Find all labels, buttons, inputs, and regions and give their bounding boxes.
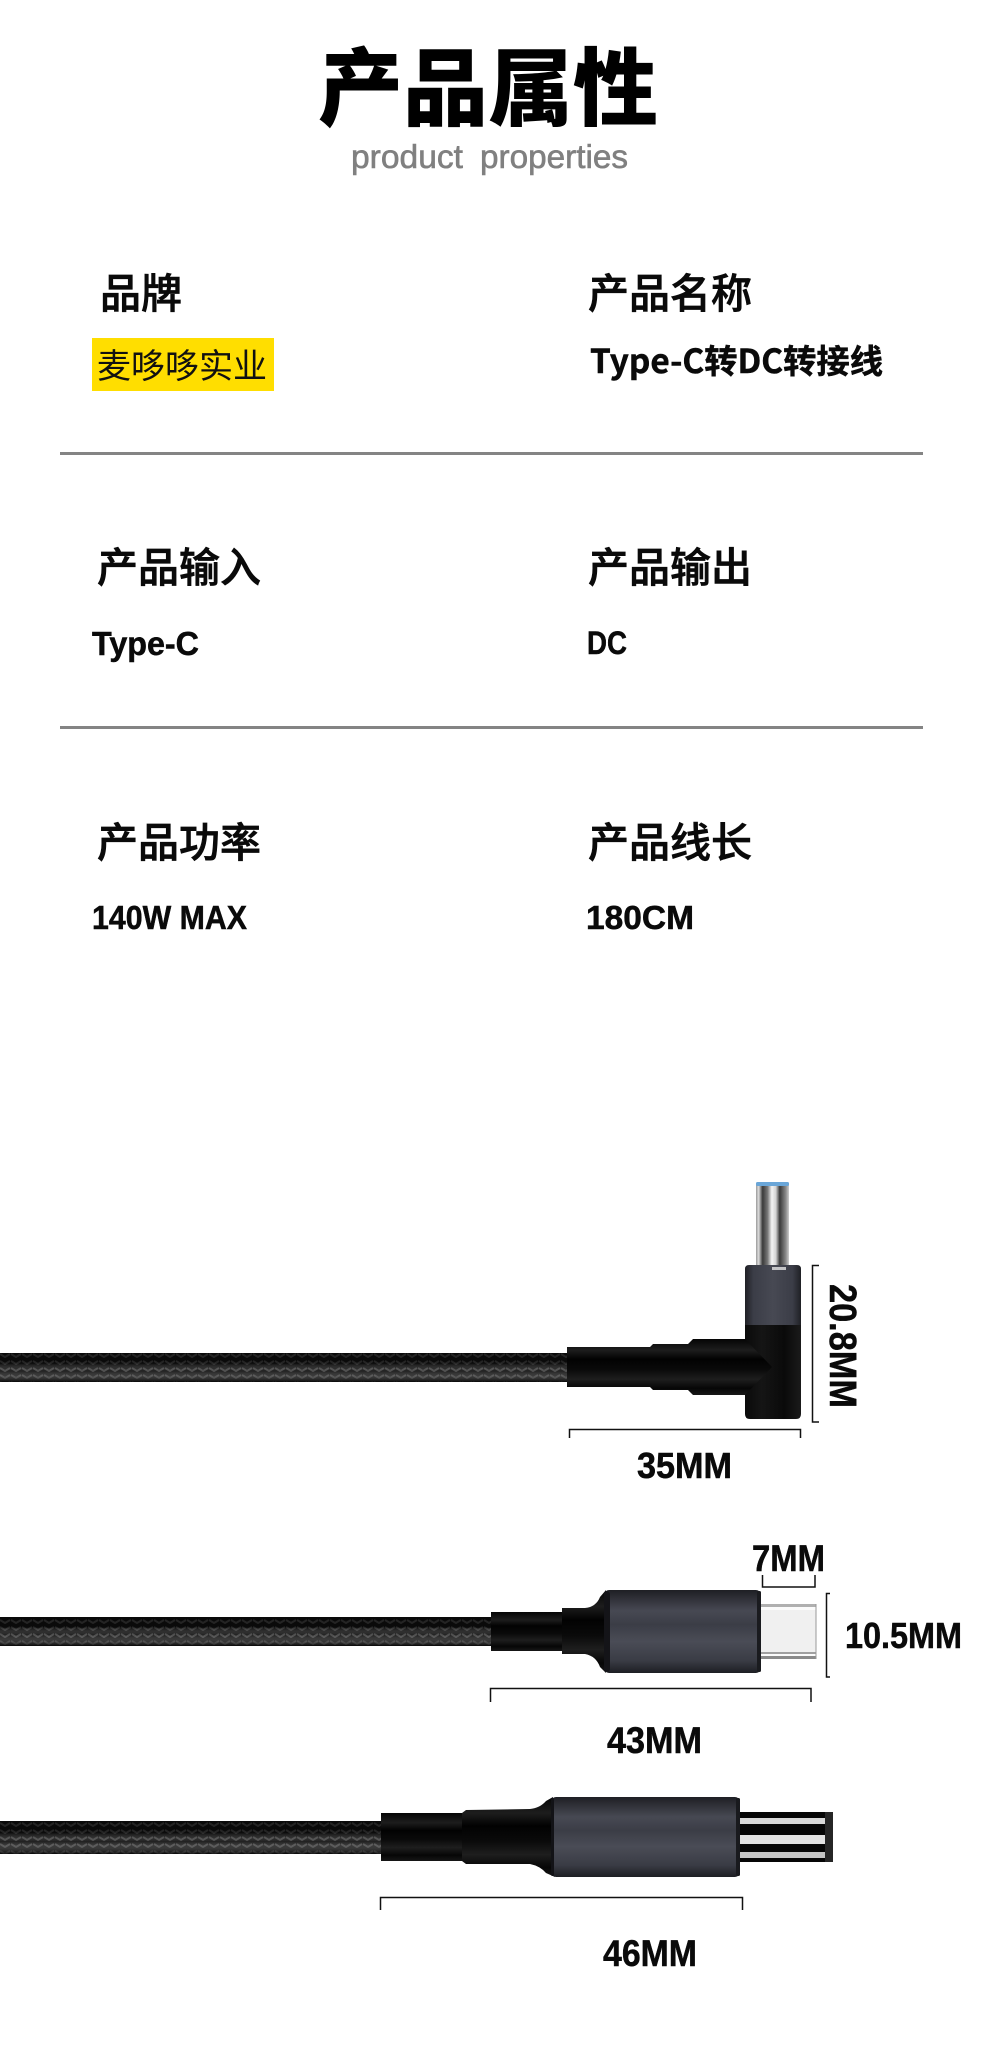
attribute: output: 产品输出 bbox=[588, 534, 752, 594]
attribute: product name: 产品名称 bbox=[588, 260, 752, 320]
attribute: product name bbox=[588, 260, 883, 383]
attribute: cable length: 产品线长 bbox=[588, 809, 752, 869]
attribute: input: Type-C bbox=[92, 625, 199, 662]
attribute: brand bbox=[92, 260, 274, 391]
dimension: 35MM bbox=[570, 1430, 800, 1486]
icon: metal pin with blue tip bbox=[756, 1182, 789, 1266]
dimension: 35MM: 35MM bbox=[637, 1445, 732, 1486]
dimension: 43MM: 43MM bbox=[607, 1720, 702, 1761]
connector body bbox=[567, 1265, 801, 1419]
subtitle: product bbox=[351, 138, 463, 175]
attribute: product name: Type-C转DC转接线 bbox=[590, 335, 883, 383]
diagram: Type-C connector bbox=[0, 1538, 962, 1761]
dimension: 10.5MM: 10.5MM bbox=[845, 1615, 962, 1656]
dimension: 20.8MM: 20.8MM bbox=[821, 1284, 863, 1408]
icon: DC barrel pin bbox=[738, 1812, 833, 1862]
icon: USB-C plug bbox=[759, 1604, 816, 1659]
panel: product attributes bbox=[92, 260, 883, 936]
attribute: brand: 品牌 bbox=[100, 260, 182, 320]
dimension: 46MM: 46MM bbox=[603, 1933, 697, 1974]
attribute: input: 产品输入 bbox=[97, 534, 261, 594]
connector body bbox=[491, 1590, 761, 1673]
attribute: power: 140W MAX bbox=[92, 899, 247, 936]
cable bbox=[0, 1617, 493, 1646]
cable bbox=[0, 1821, 384, 1854]
connector body bbox=[381, 1797, 740, 1877]
title: 产品属性 bbox=[318, 43, 658, 138]
attribute: input bbox=[92, 534, 261, 662]
attribute: power: 产品功率 bbox=[97, 809, 261, 869]
attribute: output bbox=[587, 534, 752, 661]
dimension: 10.5MM bbox=[826, 1594, 962, 1677]
subtitle: properties bbox=[480, 138, 628, 175]
attribute: brand: 麦哆哆实业 bbox=[97, 348, 267, 386]
dimension: 7MM: 7MM bbox=[752, 1538, 825, 1579]
attribute: cable length bbox=[586, 809, 752, 936]
attribute: power bbox=[92, 809, 261, 936]
diagram: straight DC connector bbox=[0, 1797, 833, 1974]
dimension: 43MM bbox=[490, 1688, 811, 1761]
dimension: 46MM bbox=[380, 1898, 742, 1974]
cable bbox=[0, 1353, 570, 1382]
attribute: cable length: 180CM bbox=[586, 899, 694, 936]
diagram: angled DC connector bbox=[0, 1182, 863, 1486]
subtitle bbox=[351, 138, 628, 175]
attribute: output: DC bbox=[587, 625, 627, 661]
